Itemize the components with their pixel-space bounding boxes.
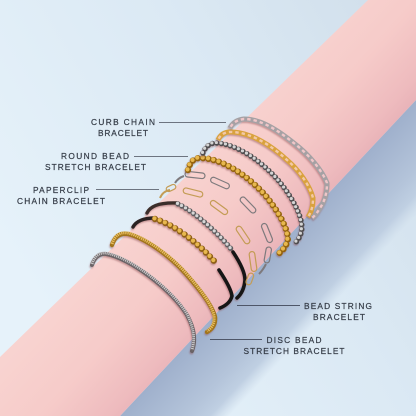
label: disc bead stretch bracelet (210, 335, 344, 356)
bracelet: black cord with gold beads (133, 218, 232, 308)
bracelet: disc bead stretch (92, 253, 194, 351)
bracelet: gold round bead stretch (188, 157, 288, 255)
cast shadow (120, 100, 416, 416)
label: bead string bracelet: BEAD STRING (304, 301, 372, 311)
label: round bead stretch bracelet: STRETCH BRACELET (45, 162, 146, 172)
label: round bead stretch bracelet (45, 151, 188, 172)
label: round bead stretch bracelet: ROUND BEAD (61, 151, 129, 161)
bracelet: black cord with silver beads (147, 203, 245, 298)
label: curb chain bracelet: CURB CHAIN (91, 117, 155, 127)
bracelet: gold curb chain (218, 132, 313, 217)
bracelet: silver round bead stretch (202, 142, 302, 243)
label: paperclip chain bracelet: CHAIN BRACELET (17, 196, 105, 206)
label: bead string bracelet (237, 301, 372, 322)
label: curb chain bracelet: BRACELET (98, 128, 148, 138)
label: curb chain bracelet (91, 117, 226, 138)
label: disc bead stretch bracelet: DISC BEAD (266, 335, 322, 345)
bracelet: gold bead (112, 233, 215, 332)
bracelet: silver curb chain (230, 119, 327, 218)
label: paperclip chain bracelet (17, 185, 159, 206)
label: paperclip chain bracelet: PAPERCLIP (33, 185, 89, 195)
bracelet: gold paperclip chain (160, 184, 257, 285)
label: disc bead stretch bracelet: STRETCH BRACELET (244, 346, 344, 356)
label: bead string bracelet: BRACELET (313, 312, 365, 322)
bracelet: silver paperclip chain (175, 171, 273, 274)
